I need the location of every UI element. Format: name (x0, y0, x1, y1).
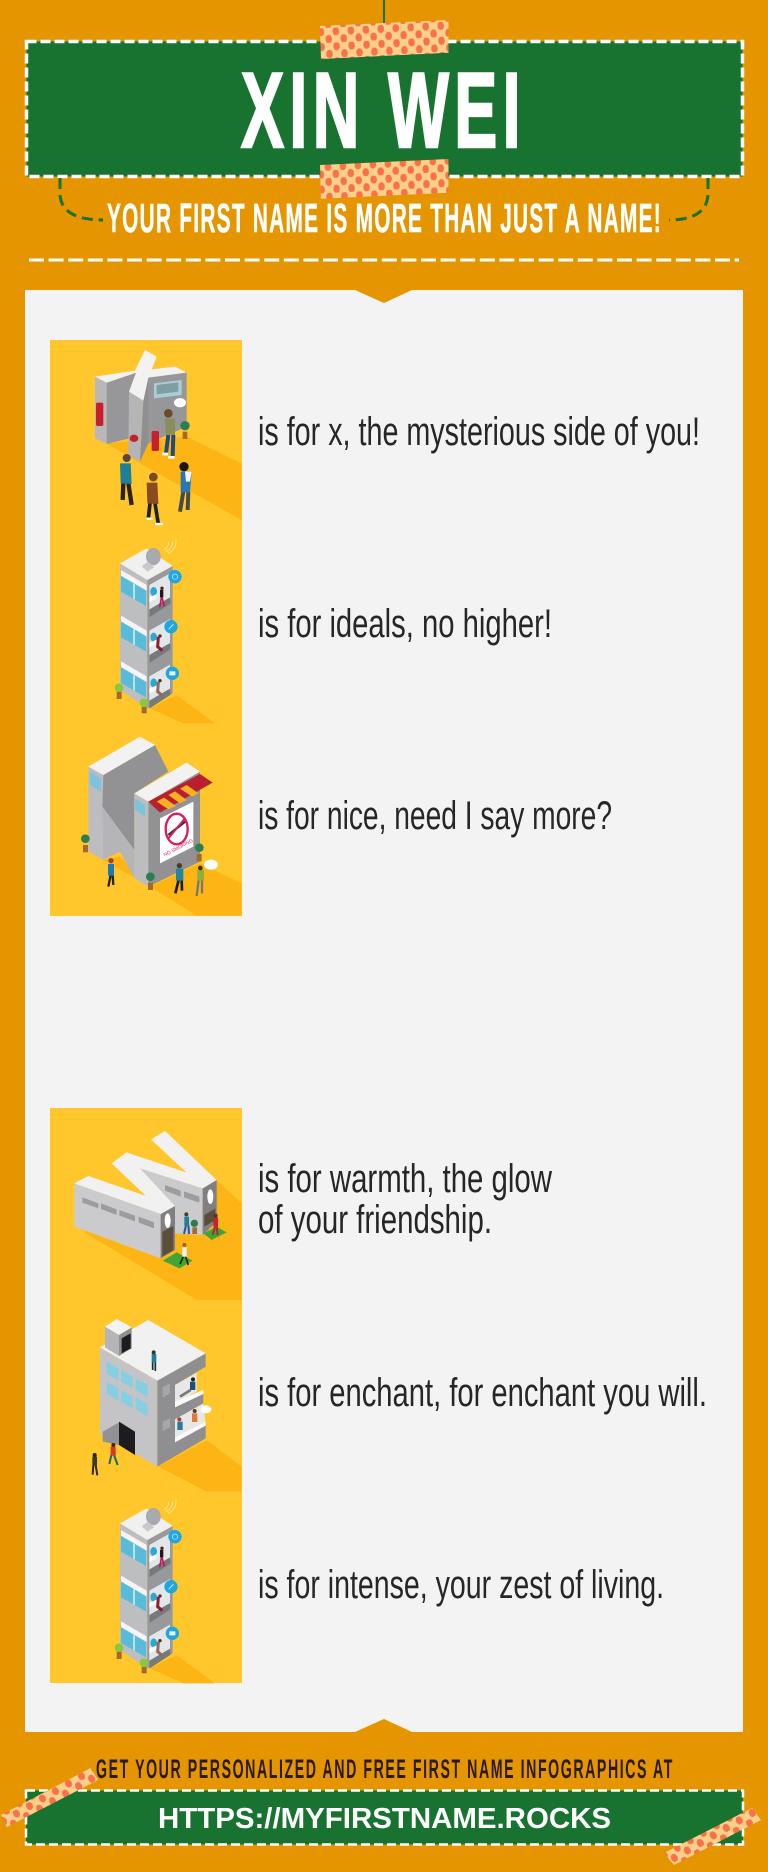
text line: I: is for ideals, no higher! (258, 602, 552, 646)
illustration: letter I tower, repeat (115, 1499, 215, 1683)
illustration: letter E building (92, 1319, 242, 1492)
illustration column: X I N (50, 340, 242, 916)
tape: bottom (320, 159, 448, 199)
footer url: HTTPS://MYFIRSTNAME.ROCKS (158, 1803, 611, 1835)
text block: W (258, 1157, 552, 1242)
tape: footer right (664, 1808, 761, 1865)
text line: N: is for nice, need I say more? (258, 794, 612, 838)
top notch (355, 290, 412, 303)
connector: left (60, 178, 103, 220)
illustration: letter N building (81, 737, 242, 916)
illustration: letter W building (74, 1131, 242, 1300)
tape: top (320, 20, 448, 59)
panel: letters (25, 290, 743, 1732)
illustration: letter N building: NO SMOKING (163, 838, 194, 858)
bottom notch (355, 1719, 412, 1732)
tape: footer left (1, 1768, 98, 1827)
illustration: letter I tower (115, 539, 215, 723)
text block: W: of your friendship. (258, 1198, 492, 1242)
illustration column: W E I (50, 1108, 242, 1683)
connector: right (669, 178, 708, 220)
footer banner (26, 1790, 743, 1844)
title text: XIN WEI (241, 50, 526, 170)
hanging thread (383, 0, 385, 24)
title banner (26, 42, 742, 176)
illustration: letter X building (95, 350, 242, 524)
text block: W: is for warmth, the glow (258, 1157, 552, 1201)
